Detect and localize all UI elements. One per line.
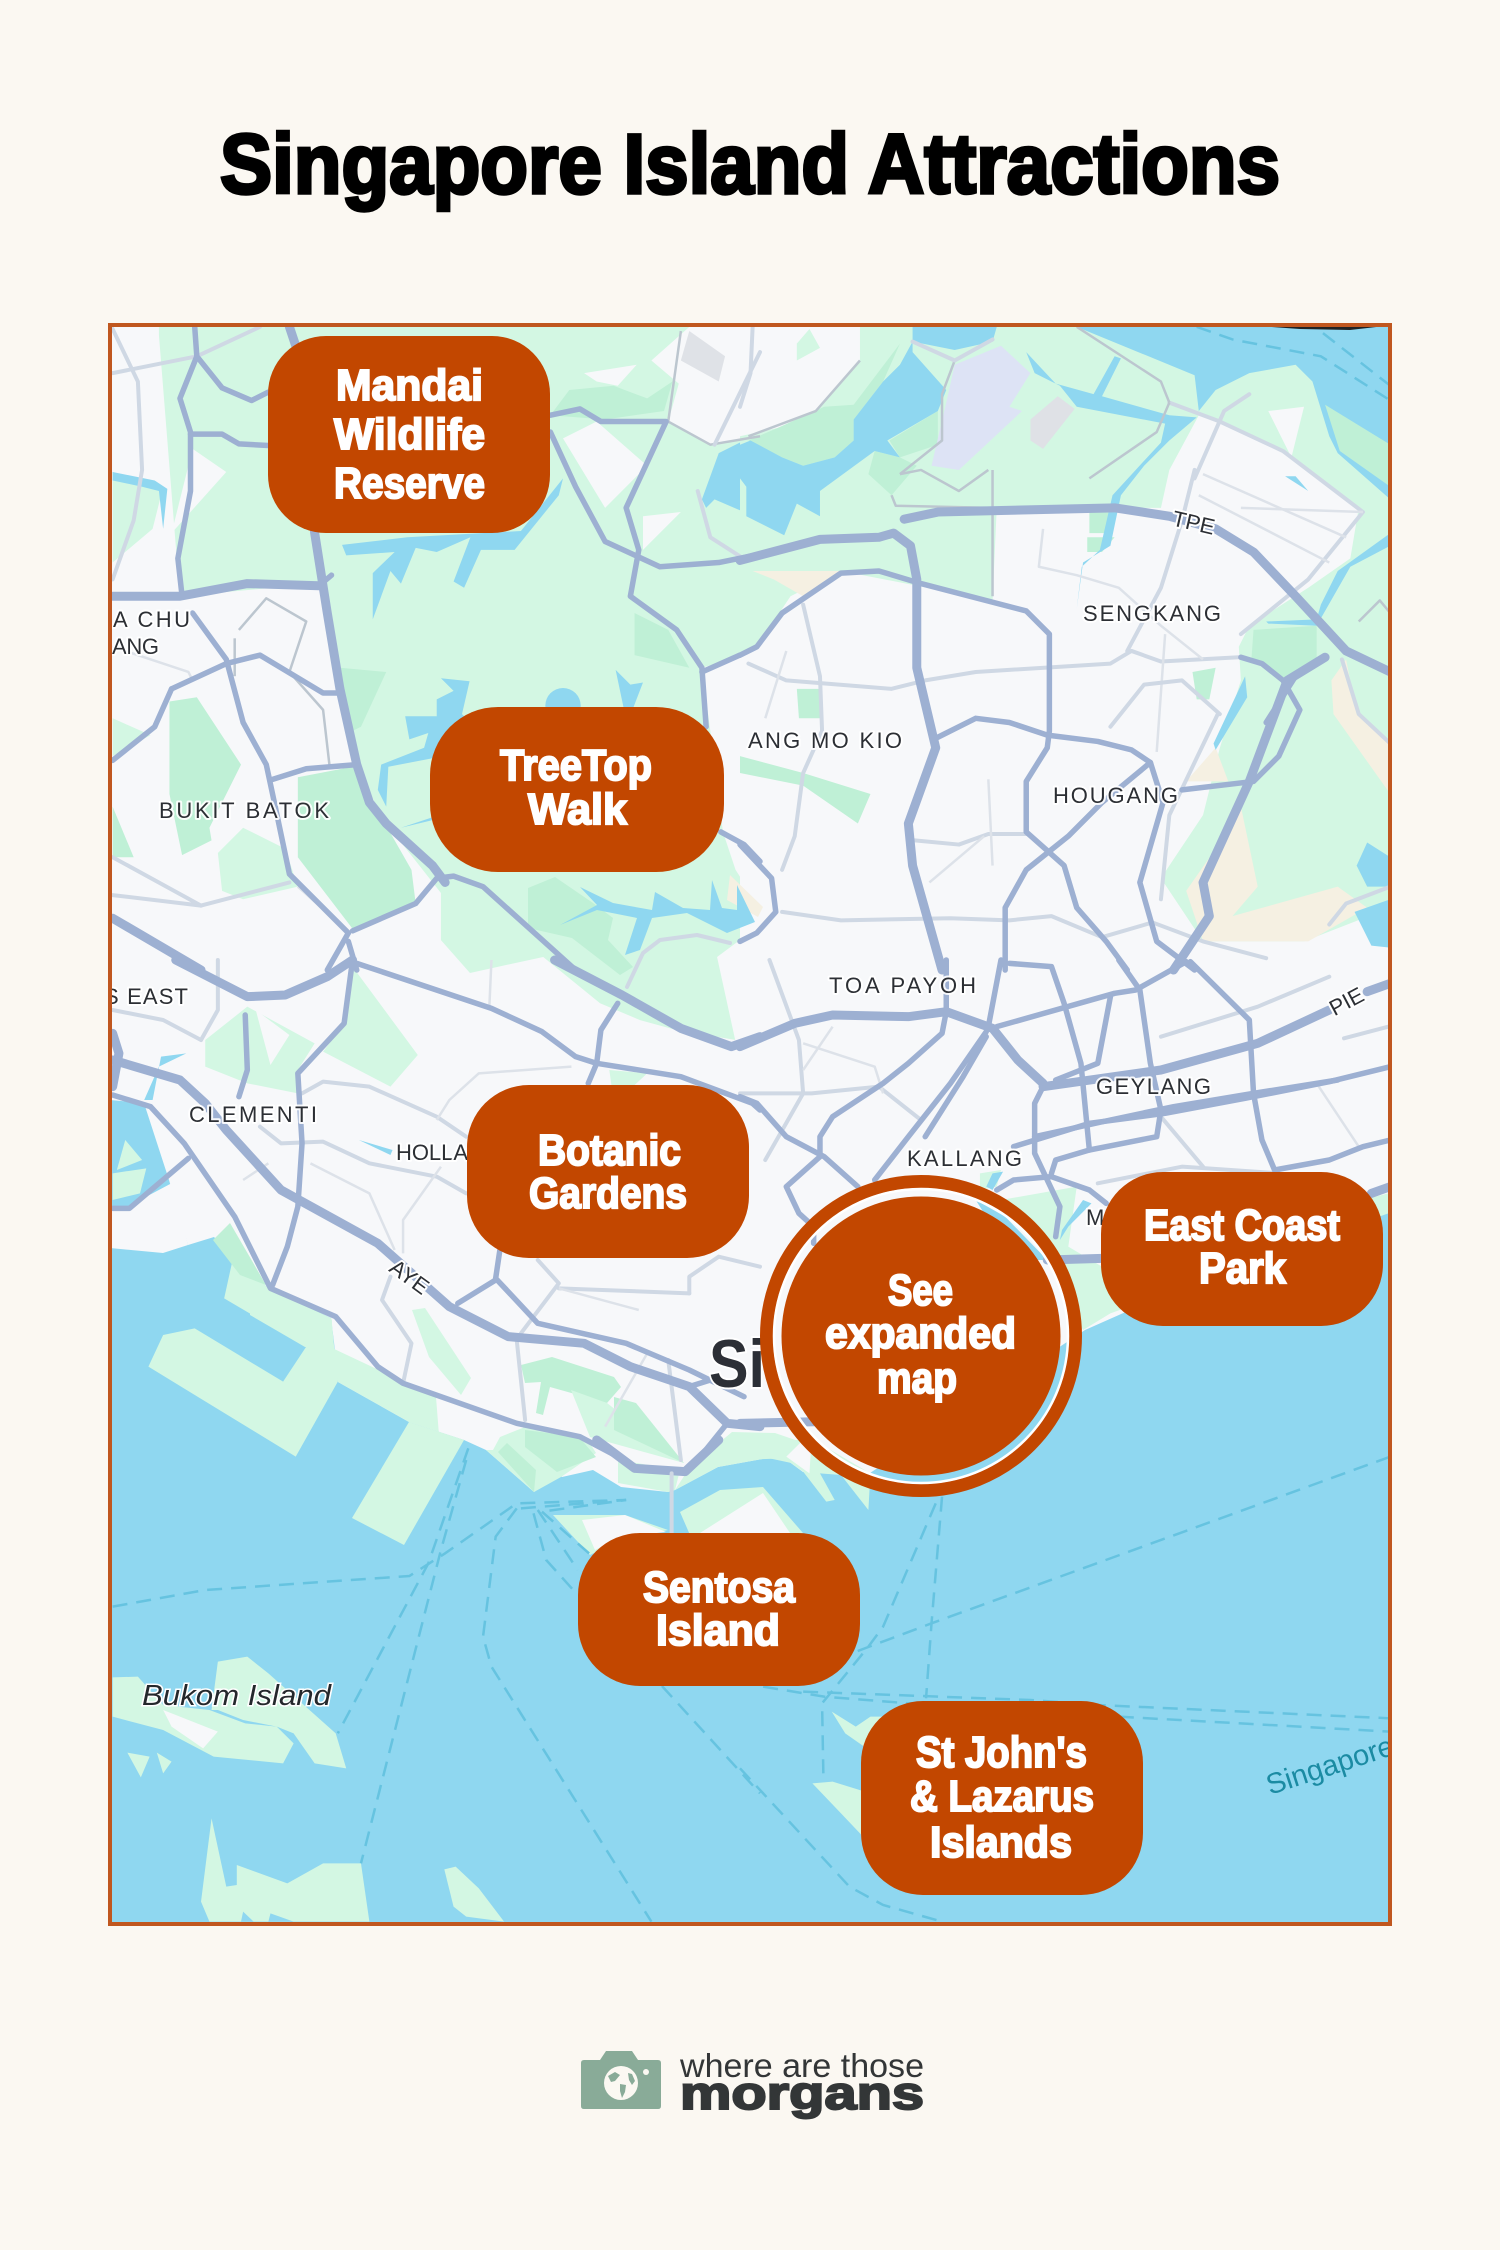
pin: Sentosa Island: Sentosa: [643, 1563, 795, 1612]
water: sea: [110, 1100, 1390, 1924]
map labels: S EAST: [104, 984, 188, 1009]
land: southern islands: [113, 1440, 892, 1922]
icon: camera with globe: [581, 2051, 661, 2109]
map labels: HOUGANG: [1053, 783, 1178, 808]
pin: East Coast Park: East Coast: [1144, 1201, 1340, 1250]
map labels: [104, 506, 1398, 1802]
map labels: KALLANG: [907, 1146, 1022, 1171]
pin: TreeTop Walk: TreeTop: [500, 741, 652, 790]
map labels: ANG MO KIO: [748, 728, 902, 753]
land: northern and central green areas: [113, 327, 1390, 1457]
map labels: GEYLANG: [1096, 1074, 1211, 1099]
map labels: ANG: [112, 634, 159, 659]
pin: Botanic Gardens: Gardens: [529, 1169, 687, 1218]
map labels: BUKIT BATOK: [159, 798, 329, 823]
major roads: [113, 327, 1390, 1533]
pin: Mandai Wildlife Reserve: Mandai: [336, 361, 483, 410]
pin: East Coast Park: [1101, 1172, 1383, 1326]
reservoir and parks near MacRitchie: [528, 875, 763, 975]
pin: TreeTop Walk: Walk: [528, 785, 628, 834]
pin: Botanic Gardens: [467, 1085, 749, 1258]
map labels: PIE: [1325, 982, 1368, 1021]
pin: Mandai Wildlife Reserve: Wildlife: [334, 410, 485, 459]
pin: Mandai Wildlife Reserve: Reserve: [334, 459, 485, 508]
map labels: TPE: [1170, 506, 1217, 540]
pin: Mandai Wildlife Reserve: [268, 336, 550, 533]
button: see expanded map: [766, 1182, 1076, 1490]
map labels: A CHU: [113, 607, 190, 632]
map labels: TOA PAYOH: [829, 973, 976, 998]
map labels: CLEMENTI: [189, 1102, 317, 1127]
map border: [110, 325, 1390, 1924]
map labels: Singapore: [1262, 1730, 1398, 1802]
map labels: SENGKANG: [1083, 601, 1221, 626]
title: Singapore Island Attractions: [220, 117, 1280, 211]
pin: Botanic Gardens: Botanic: [538, 1126, 681, 1175]
logo: [581, 2047, 924, 2119]
pin: TreeTop Walk: [430, 707, 724, 872]
land: southern coast greens: [213, 1223, 810, 1555]
button: see expanded map: map: [877, 1354, 957, 1403]
map edge fragment: [1272, 327, 1376, 330]
pin: St John's and Lazarus Islands: St John's: [916, 1728, 1087, 1777]
map labels: AYE: [385, 1254, 434, 1300]
button: see expanded map: expanded: [825, 1309, 1016, 1358]
logo wordmark bottom: morgans: [680, 2067, 924, 2119]
pin: St John's and Lazarus Islands: Islands: [930, 1818, 1072, 1867]
pin: Sentosa Island: [578, 1533, 860, 1686]
pin: St John's and Lazarus Islands: & Lazarus: [910, 1772, 1094, 1821]
logo wordmark top: where are those: [679, 2047, 924, 2084]
panel: map: [104, 325, 1398, 1924]
pin: East Coast Park: Park: [1199, 1244, 1286, 1293]
button: see expanded map: See: [888, 1266, 953, 1315]
shipping lanes: [113, 327, 1390, 1922]
pin: St John's and Lazarus Islands: [861, 1701, 1143, 1895]
map labels: HOLLA: [396, 1140, 468, 1165]
pin: Sentosa Island: Island: [656, 1606, 780, 1655]
land: west coast patch: [110, 1183, 188, 1253]
minor roads: [113, 327, 1390, 1460]
map labels: Si: [709, 1326, 765, 1402]
map labels: M: [1086, 1205, 1104, 1230]
map labels: Bukom Island: [142, 1680, 332, 1712]
